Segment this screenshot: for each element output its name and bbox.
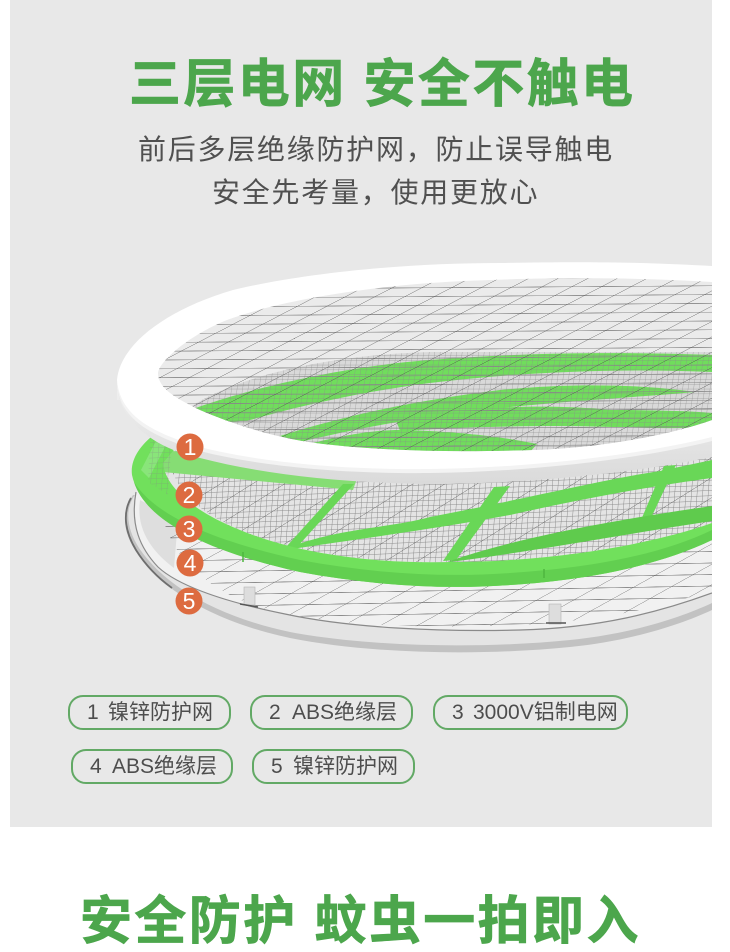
legend pill 4: ABS绝缘层 bbox=[112, 755, 217, 778]
badge 5: 5 bbox=[183, 588, 195, 614]
legend pill 2: 2 bbox=[269, 701, 281, 724]
badge 3: 3 bbox=[183, 516, 195, 542]
legend pill 3 bbox=[433, 695, 628, 730]
legend pill 2: ABS绝缘层 bbox=[292, 701, 397, 724]
layer 1: top frame lip bbox=[117, 384, 712, 473]
legend pill 4 bbox=[71, 749, 233, 784]
subtitle line 1: 前后多层绝缘防护网，防止误导触电 bbox=[138, 134, 614, 165]
title: 三层电网 安全不触电 bbox=[129, 56, 635, 114]
legend pill 1 bbox=[68, 695, 231, 730]
see-through green bars bbox=[193, 353, 712, 452]
layer 2: green ABS insulation ring bbox=[132, 434, 712, 587]
layer 2: green ABS struts bbox=[163, 450, 712, 562]
layer 1: top white mesh frame side bbox=[150, 434, 712, 484]
legend pill 5 bbox=[252, 749, 415, 784]
legend pill 4: 4 bbox=[90, 755, 102, 778]
layer 5: bottom nickel-zinc mesh frame bbox=[125, 480, 712, 652]
badge 1: 1 bbox=[184, 434, 196, 460]
layer 3: dense 3000V aluminium mesh bbox=[173, 450, 712, 562]
badge 2: 2 bbox=[183, 482, 195, 508]
legend pill 1: 镍锌防护网 bbox=[108, 701, 213, 724]
badge 4 bbox=[176, 550, 204, 576]
layer 1: top mesh opening bbox=[158, 278, 712, 452]
mesh support posts bbox=[240, 587, 566, 624]
layer 1: top white frame bbox=[117, 262, 712, 469]
subtitle line 2: 安全先考量，使用更放心 bbox=[212, 177, 539, 208]
legend pill 3: 3000V铝制电网 bbox=[473, 701, 618, 724]
layer 5: coarse mesh bbox=[165, 520, 712, 626]
legend pill 2 bbox=[250, 695, 413, 730]
number badges bbox=[176, 434, 204, 614]
see-through dense mesh base bbox=[190, 352, 712, 460]
badge 3 bbox=[176, 516, 202, 542]
illustration: exploded view of racket mesh layers bbox=[117, 262, 712, 652]
legend pill 1: 1 bbox=[87, 701, 99, 724]
badge 2 bbox=[176, 482, 202, 508]
see-through dense mesh lines bbox=[190, 352, 712, 460]
legend pill 5: 5 bbox=[271, 755, 283, 778]
badge 4: 4 bbox=[184, 550, 197, 576]
coarse top mesh lines bbox=[158, 278, 712, 452]
legend pill 3: 3 bbox=[452, 701, 464, 724]
badge 1 bbox=[176, 434, 204, 460]
badge 5 bbox=[176, 588, 202, 614]
bottom heading: 安全防护 蚊虫一拍即入 bbox=[80, 893, 641, 951]
legend pill 5: 镍锌防护网 bbox=[293, 755, 398, 778]
